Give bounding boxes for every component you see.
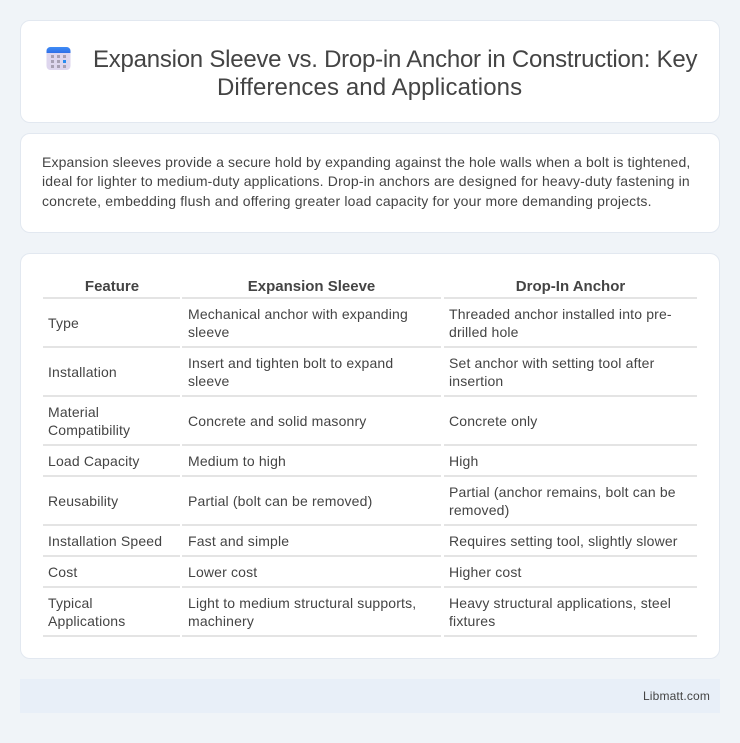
row: installation speed: Fast and simple bbox=[188, 533, 289, 549]
row: installation: sleeve bbox=[188, 373, 229, 389]
row: typical applications: Applications bbox=[48, 613, 125, 629]
row: load capacity: Medium to high bbox=[188, 453, 286, 469]
row: typical applications: Heavy structural applications, steel bbox=[449, 595, 671, 611]
table header bbox=[85, 278, 625, 295]
row: installation: insertion bbox=[449, 373, 503, 389]
row: reusability: Partial (anchor remains, bolt can be bbox=[449, 484, 676, 500]
row: reusability: Reusability bbox=[48, 493, 118, 509]
intro text: Expansion sleeves provide a secure hold by expanding against the hole walls when a bolt is tightened, bbox=[42, 154, 690, 170]
footer bbox=[20, 679, 720, 713]
row: installation: Set anchor with setting tool after bbox=[449, 355, 654, 371]
row: installation bbox=[48, 355, 654, 389]
row: type bbox=[48, 306, 672, 340]
row: installation speed bbox=[48, 533, 678, 549]
row: typical applications: machinery bbox=[188, 613, 254, 629]
title: Differences and Applications bbox=[217, 74, 522, 101]
row: typical applications bbox=[48, 595, 671, 629]
intro text: ideal for lighter to medium-duty applications. Drop-in anchors are designed for heavy-duty fastening in bbox=[42, 173, 690, 189]
row: type: sleeve bbox=[188, 324, 229, 340]
table header: Drop-In Anchor bbox=[516, 278, 625, 295]
title: Expansion Sleeve vs. Drop-in Anchor in Construction: Key bbox=[93, 46, 697, 73]
panel: title card bbox=[20, 20, 720, 123]
row: typical applications: fixtures bbox=[449, 613, 495, 629]
title bbox=[93, 46, 698, 101]
row: installation: Installation bbox=[48, 364, 117, 380]
row: installation: Insert and tighten bolt to expand bbox=[188, 355, 393, 371]
icon: calendar bbox=[46, 47, 70, 70]
row: material compatibility: Concrete and solid masonry bbox=[188, 413, 366, 429]
row: typical applications: Typical bbox=[48, 595, 93, 611]
intro text bbox=[42, 154, 690, 209]
row: cost: Lower cost bbox=[188, 564, 257, 580]
row: type: Threaded anchor installed into pre- bbox=[449, 306, 672, 322]
row: cost: Higher cost bbox=[449, 564, 522, 580]
row: material compatibility: Material bbox=[48, 404, 99, 420]
table header: Expansion Sleeve bbox=[248, 278, 375, 295]
row: cost: Cost bbox=[48, 564, 77, 580]
row: installation speed: Requires setting tool, slightly slower bbox=[449, 533, 678, 549]
row: reusability bbox=[48, 484, 676, 518]
row: typical applications: Light to medium structural supports, bbox=[188, 595, 416, 611]
row: cost bbox=[48, 564, 522, 580]
footer credit: Libmatt.com bbox=[643, 689, 710, 703]
table header: Feature bbox=[85, 278, 139, 295]
row: load capacity: High bbox=[449, 453, 478, 469]
panel: comparison table bbox=[20, 253, 720, 659]
row: reusability: Partial (bolt can be removed) bbox=[188, 493, 372, 509]
row: type: drilled hole bbox=[449, 324, 519, 340]
row: reusability: removed) bbox=[449, 502, 509, 518]
row: load capacity bbox=[48, 453, 478, 469]
row: type: Type bbox=[48, 315, 79, 331]
intro text: concrete, embedding flush and offering greater load capacity for your more demanding projects. bbox=[42, 193, 652, 209]
row: type: Mechanical anchor with expanding bbox=[188, 306, 408, 322]
row: load capacity: Load Capacity bbox=[48, 453, 140, 469]
panel: introduction bbox=[20, 133, 720, 233]
row: installation speed: Installation Speed bbox=[48, 533, 162, 549]
row: material compatibility: Compatibility bbox=[48, 422, 130, 438]
row: material compatibility: Concrete only bbox=[449, 413, 537, 429]
row: material compatibility bbox=[48, 404, 538, 438]
